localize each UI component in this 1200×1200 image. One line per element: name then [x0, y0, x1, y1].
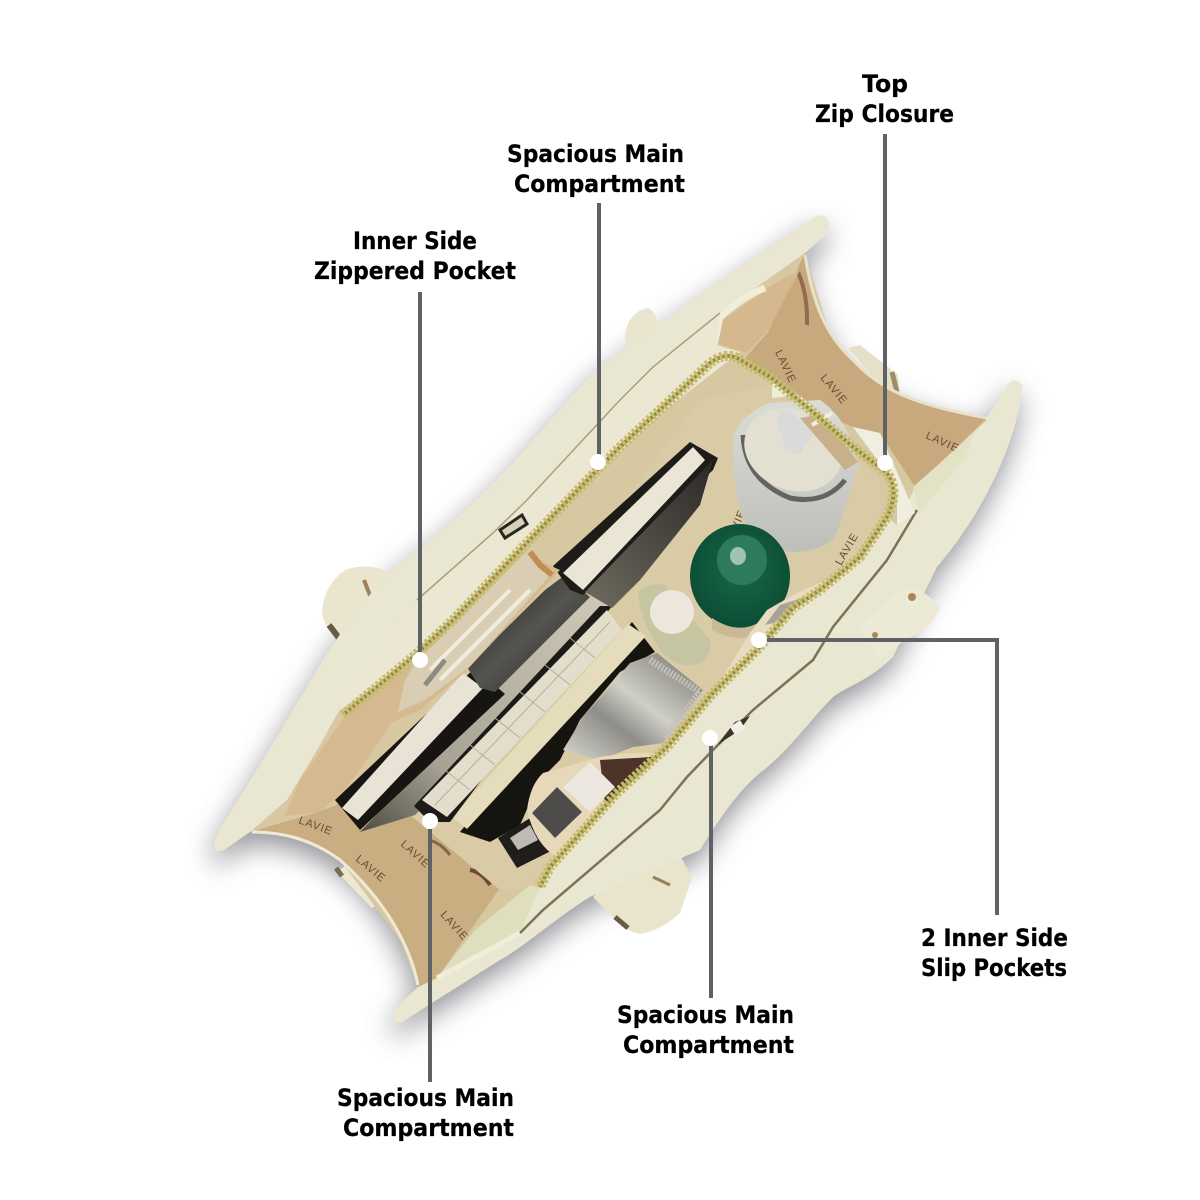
silver tin — [563, 653, 703, 760]
front flap between zipper and wall — [520, 510, 917, 933]
cream page edge, third notebook — [452, 624, 646, 829]
clasps — [500, 515, 750, 745]
callout: 2 inner side slip pockets: 2 Inner Side — [921, 924, 1068, 952]
interior lining — [250, 253, 987, 987]
callout: spacious main compartment top: Compartment — [514, 170, 685, 198]
grey cube — [532, 787, 582, 838]
callout: spacious main compartment bottom — [337, 813, 514, 1142]
callout: 2 inner side slip pockets — [751, 632, 1068, 982]
lower end panel: LAVIE — [353, 853, 388, 885]
bag body — [214, 216, 1022, 1023]
zipper — [343, 356, 894, 887]
left handle — [322, 566, 400, 640]
callout: top zip closure — [815, 70, 954, 471]
small glass bottle — [638, 584, 710, 665]
lining between notebooks — [360, 597, 612, 832]
zippered pocket with phone — [285, 552, 560, 816]
black leather pouch — [467, 575, 590, 692]
callout: spacious main compartment bottom: Compartment — [343, 1114, 514, 1142]
callout: spacious main compartment right: Compartment — [623, 1031, 794, 1059]
callout: inner side zippered pocket: Zippered Pocket — [314, 257, 516, 285]
upper end panel — [745, 253, 987, 487]
handles behind the bag — [322, 308, 900, 934]
callout: 2 inner side slip pockets: Slip Pockets — [921, 954, 1067, 982]
white cube — [563, 762, 615, 812]
callout: spacious main compartment right: Spacious Main — [617, 1001, 794, 1029]
lower end panel: LAVIE — [398, 838, 432, 871]
callout: inner side zippered pocket — [314, 227, 516, 668]
callout: spacious main compartment right — [617, 730, 794, 1059]
black notebook behind tin — [460, 622, 655, 842]
callout: top zip closure: Zip Closure — [815, 100, 954, 128]
lower end panel: LAVIE — [438, 909, 470, 943]
inner floor: LAVIE — [833, 531, 861, 568]
right zipper flap — [770, 377, 915, 525]
lower left handle — [336, 862, 386, 908]
pocket lip with silver — [715, 578, 830, 690]
lower end panel — [250, 800, 500, 987]
callout: spacious main compartment top: Spacious Main — [507, 140, 684, 168]
pouch and cubes — [498, 753, 660, 868]
bottom right handle — [593, 830, 692, 934]
first notebook — [335, 668, 505, 830]
grey pump bottle — [732, 394, 858, 552]
small black bottle — [498, 815, 553, 868]
callout: spacious main compartment top — [507, 140, 685, 470]
top handle — [625, 308, 658, 368]
right handle — [860, 589, 940, 660]
callout: spacious main compartment bottom: Spacious Main — [337, 1084, 514, 1112]
upper end handle — [848, 345, 900, 397]
inner floor — [410, 385, 880, 890]
callout: inner side zippered pocket: Inner Side — [353, 227, 477, 255]
inner floor: LAVIE — [724, 508, 749, 545]
upper end panel: LAVIE — [818, 372, 850, 407]
second notebook — [553, 442, 718, 608]
bag shadow — [212, 228, 1020, 1035]
upper end panel: LAVIE — [772, 348, 798, 385]
grid notebook — [414, 606, 622, 822]
upper slip pocket — [714, 270, 975, 512]
back flap between wall and zipper — [333, 313, 740, 715]
lower end panel: LAVIE — [297, 815, 334, 838]
callout: top zip closure: Top — [862, 70, 908, 98]
pouch edge — [527, 753, 660, 858]
upper end panel: LAVIE — [924, 430, 961, 455]
lower slip pocket — [437, 885, 560, 978]
zip pull tag — [800, 413, 858, 470]
green bottle — [690, 524, 790, 638]
